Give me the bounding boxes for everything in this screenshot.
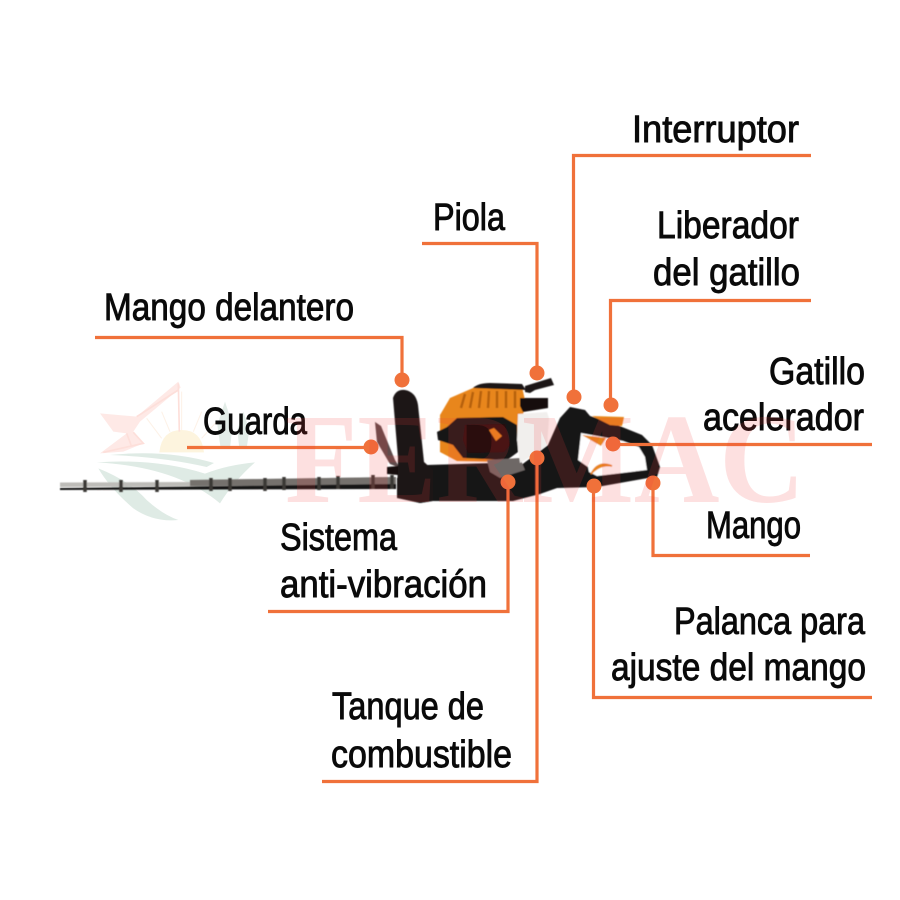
label: Gatillo acelerador: [606, 351, 872, 452]
watermark logo: fields, sun and crane: [97, 382, 255, 520]
front handle: [393, 390, 433, 503]
label: Liberador del gatillo: del gatillo: [653, 252, 800, 294]
guard: [375, 422, 400, 468]
label: Sistema anti-vibración: [268, 474, 516, 612]
handle adjustment lever: [591, 464, 612, 474]
label: Mango: [646, 476, 810, 556]
main body and rear handle: [397, 407, 660, 503]
label: Piola: [422, 197, 544, 380]
label: Interruptor: [566, 109, 811, 404]
label: Piola: Piola: [433, 197, 506, 239]
fuel tank: [517, 412, 549, 463]
tank cap: [520, 398, 548, 412]
label: Gatillo acelerador: acelerador: [703, 397, 864, 439]
label: Interruptor: Interruptor: [632, 109, 799, 151]
label: Tanque de combustible: combustible: [331, 734, 512, 776]
label: Palanca para ajuste del mango: Palanca para: [674, 601, 866, 643]
throttle release lever: [592, 416, 624, 426]
label: Liberador del gatillo: Liberador: [657, 205, 799, 247]
starter pull handle: [525, 378, 554, 393]
carburettor: [487, 458, 525, 478]
watermark text: FERMAC: [285, 388, 805, 530]
label: Guarda: [187, 401, 378, 454]
label: Mango delantero: Mango delantero: [104, 287, 354, 329]
label: Guarda: Guarda: [203, 401, 308, 443]
label: Tanque de combustible: Tanque de: [332, 686, 484, 728]
cutting blade: [60, 475, 396, 492]
engine cover fins: [461, 391, 515, 408]
label: Sistema anti-vibración: anti-vibración: [280, 564, 487, 606]
label: Palanca para ajuste del mango: ajuste del mango: [611, 647, 866, 689]
label: Liberador del gatillo: [604, 205, 811, 412]
orange diamond emblem: [489, 428, 502, 441]
throttle trigger: [582, 435, 606, 446]
top cap: [473, 383, 526, 390]
clamp block: [387, 466, 398, 475]
label: Mango: Mango: [706, 505, 801, 547]
label: Palanca para ajuste del mango: [586, 478, 872, 698]
label: Gatillo acelerador: Gatillo: [769, 351, 865, 393]
air filter cover: [437, 417, 518, 460]
label: Mango delantero: [95, 287, 410, 388]
label: Sistema anti-vibración: Sistema: [280, 517, 398, 559]
label: Tanque de combustible: [322, 450, 544, 782]
engine cover: [440, 387, 525, 462]
rear handle opening: [578, 433, 647, 476]
hedge trimmer product image: [60, 378, 660, 503]
